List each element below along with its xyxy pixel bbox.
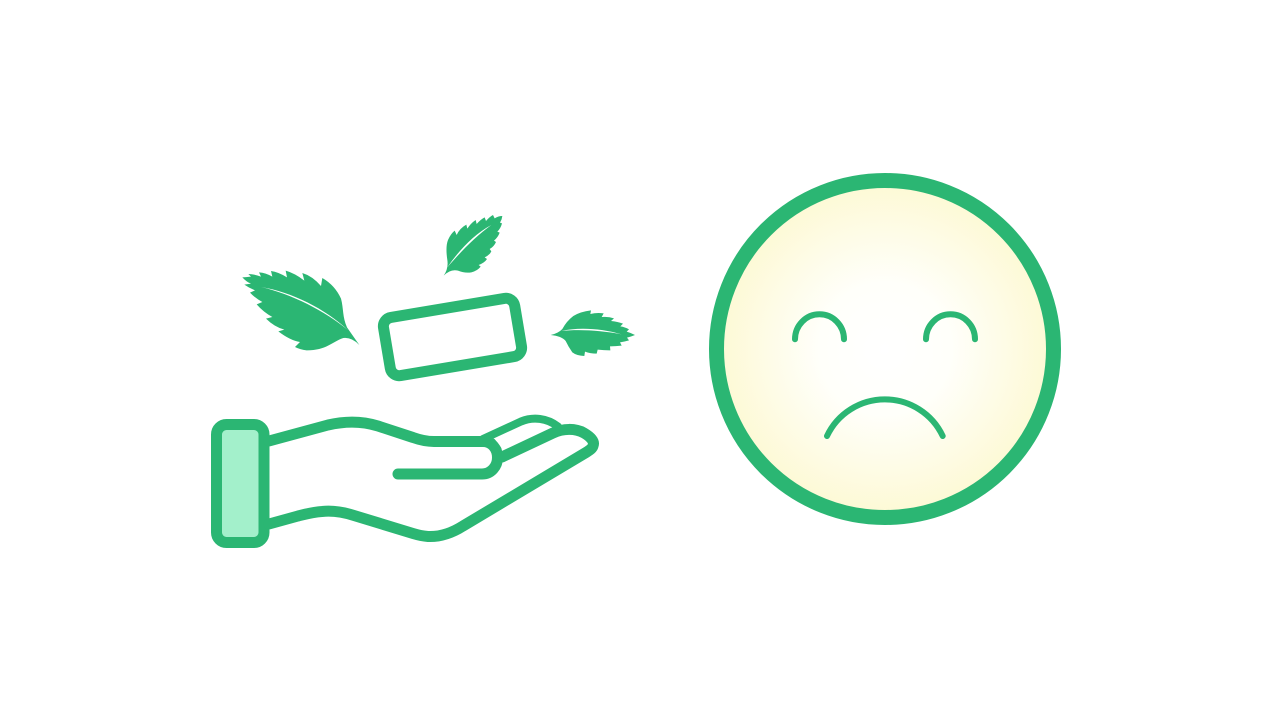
medium leaf bbox=[444, 215, 502, 276]
icon: open hand bbox=[216, 419, 593, 542]
large leaf bbox=[242, 271, 359, 350]
icon: mint leaves and gum bbox=[242, 215, 635, 377]
hand cuff bbox=[216, 424, 264, 542]
frown mouth bbox=[827, 399, 943, 436]
palm and thumb outline bbox=[269, 429, 593, 537]
fingertip bbox=[483, 419, 558, 439]
face circle bbox=[716, 180, 1054, 518]
left eye bbox=[795, 314, 844, 339]
small leaf bbox=[551, 310, 635, 356]
right eye bbox=[926, 314, 975, 339]
icon: sad face bbox=[716, 180, 1054, 518]
finger joint bbox=[493, 441, 499, 449]
hand outline bbox=[269, 422, 498, 474]
gum piece bbox=[382, 297, 523, 377]
